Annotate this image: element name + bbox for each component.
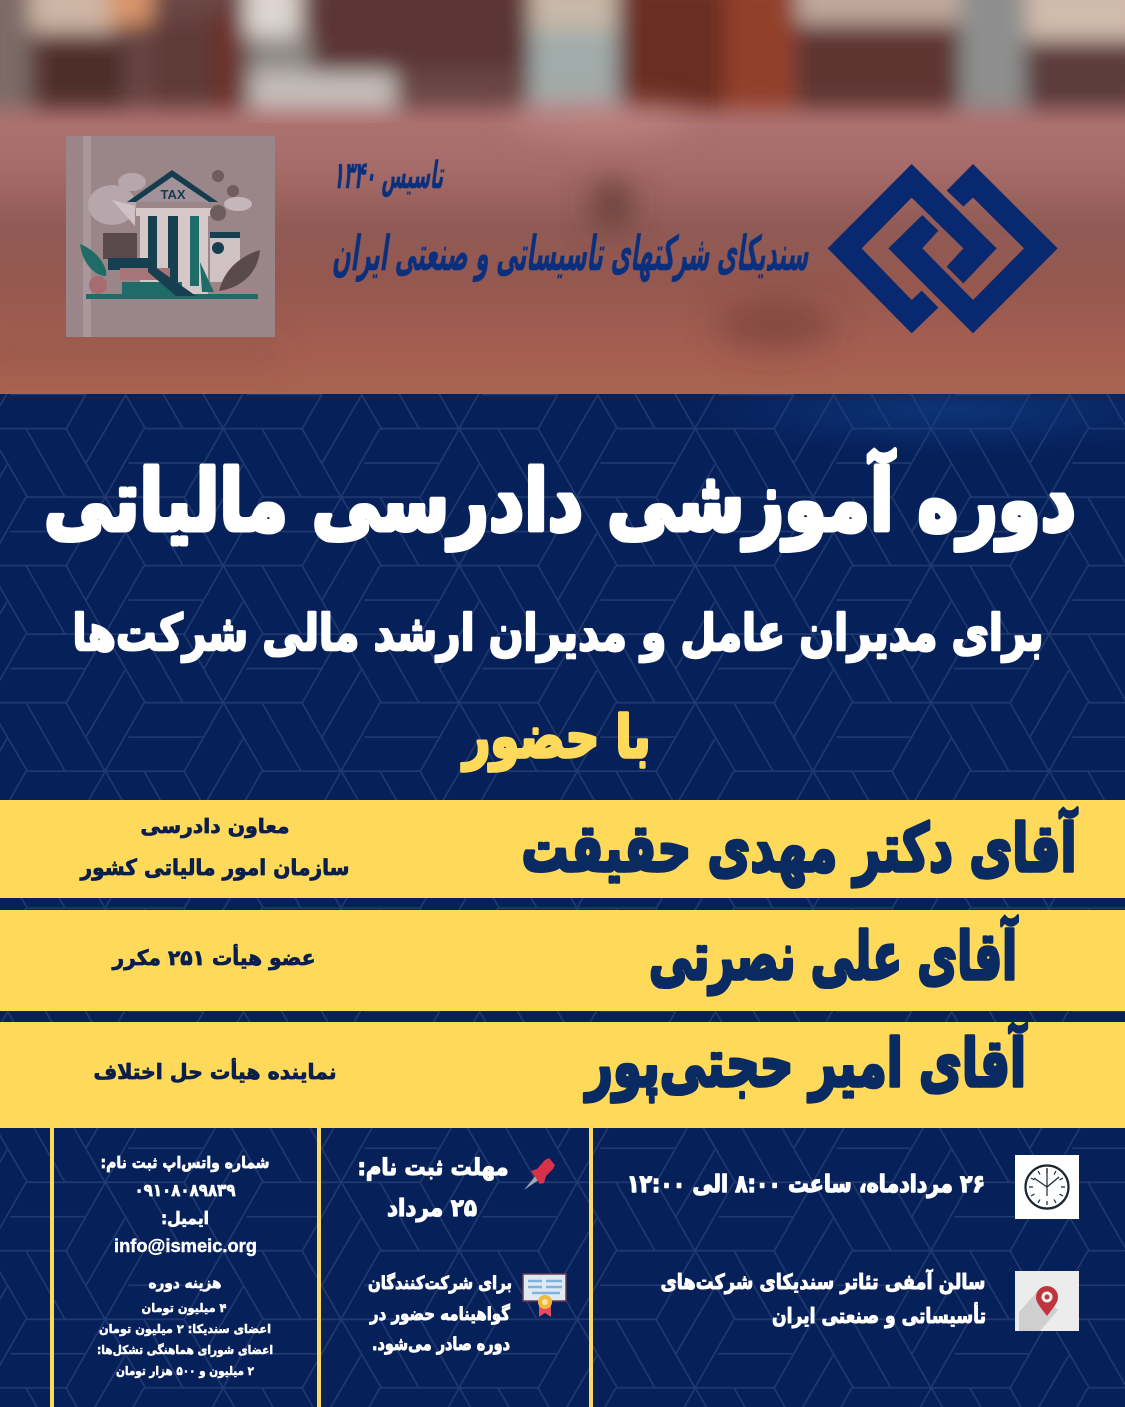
speaker band 1 [0, 800, 1125, 898]
speaker band 3 [0, 1022, 1125, 1128]
speaker role: سازمان امور مالیاتی کشور [80, 856, 350, 881]
icon: clock [1015, 1155, 1079, 1219]
panel: registration deadline and certificate [358, 1155, 566, 1355]
course fees: ۲ میلیون و ۵۰۰ هزار تومان [116, 1364, 255, 1379]
certificate note [368, 1272, 512, 1355]
venue: تأسیساتی و صنعتی ایران [772, 1301, 986, 1328]
with presence heading: با حضور [461, 703, 650, 772]
certificate note: برای شرکت‌کنندگان [368, 1272, 512, 1294]
navy patterned panel [0, 365, 1125, 1407]
course fees: ۴ میلیون تومان [142, 1301, 226, 1316]
icon: certificate [523, 1274, 566, 1317]
date and time: ۲۶ مردادماه، ساعت ۸:۰۰ الی ۱۲:۰۰ [627, 1170, 985, 1198]
speaker role [80, 814, 350, 881]
deadline: ۲۵ مرداد [387, 1194, 477, 1222]
contact details: شماره واتس‌اپ ثبت نام: [100, 1153, 270, 1173]
venue: سالن آمفی تئاتر سندیکای شرکت‌های [660, 1269, 986, 1294]
certificate note: دوره صادر می‌شود. [372, 1334, 510, 1355]
course fees: اعضای شورای هماهنگی تشکل‌ها: [97, 1343, 273, 1358]
panel: contact and fees [97, 1153, 273, 1379]
logo [828, 164, 1058, 333]
course fees [97, 1274, 273, 1379]
speaker role: عضو هیأت ۲۵۱ مکرر [112, 943, 316, 970]
contact details [100, 1153, 270, 1256]
icon: map pin [1015, 1271, 1079, 1331]
deadline: مهلت ثبت نام: [358, 1155, 508, 1181]
column dividers [50, 1128, 593, 1407]
venue [660, 1269, 986, 1328]
association name calligraphy [330, 154, 814, 282]
certificate note: گواهینامه حضور در [369, 1303, 510, 1325]
icon: pushpin [524, 1158, 555, 1190]
speaker band 2 [0, 910, 1125, 1011]
speaker role: نماینده هیأت حل اختلاف [94, 1057, 336, 1084]
label text on pediment: TAX [160, 187, 186, 202]
panel: date and venue [627, 1155, 1079, 1331]
contact details: ۰۹۱۰۸۰۸۹۸۳۹ [134, 1181, 236, 1201]
course fees: اعضای سندیکا: ۲ میلیون تومان [99, 1322, 271, 1337]
founded year: تاسیس ۱۳۴۰ [332, 154, 448, 198]
course fees: هزینه دوره [148, 1274, 222, 1292]
header photo background [0, 0, 1125, 394]
tax building illustration [66, 136, 275, 337]
speaker role: معاون دادرسی [140, 814, 290, 838]
contact details: ایمیل: [161, 1209, 209, 1229]
deadline [358, 1155, 508, 1222]
contact details: info@ismeic.org [114, 1236, 257, 1256]
